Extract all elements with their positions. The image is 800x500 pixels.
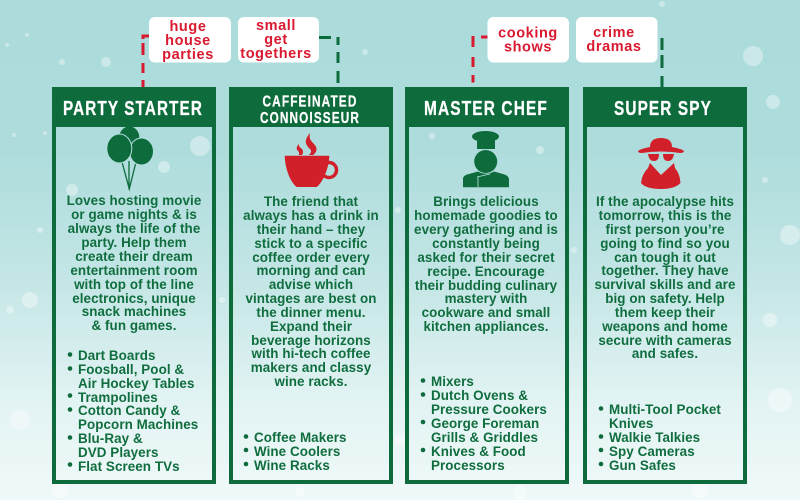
heading: CAFFEINATED	[262, 94, 358, 110]
description	[243, 194, 379, 389]
description: every gathering and is	[414, 222, 558, 237]
panel: caffeinated connoisseur	[229, 87, 393, 482]
gift list: Walkie Talkies	[609, 430, 700, 445]
gift list: Processors	[431, 458, 505, 473]
icon: spy	[638, 138, 684, 189]
gift list: Trampolines	[78, 390, 158, 405]
heading: MASTER CHEF	[424, 97, 548, 120]
panel: party starter	[52, 87, 216, 482]
tag: huge house parties: house	[165, 33, 211, 49]
tag: huge house parties	[149, 17, 231, 63]
heading: SUPER SPY	[614, 97, 712, 120]
tag: huge house parties: parties	[162, 47, 214, 63]
description: & fun games.	[91, 318, 177, 333]
icon: balloons	[107, 126, 154, 189]
heading: CONNOISSEUR	[260, 110, 360, 127]
tag: cooking shows	[488, 17, 569, 62]
tag: crime dramas	[576, 17, 658, 62]
gift list: Grills & Griddles	[431, 430, 538, 445]
gift list: Knives	[609, 416, 653, 431]
description	[594, 194, 736, 361]
description: wine racks.	[273, 374, 348, 389]
description: beverage horizons	[251, 333, 371, 348]
connector: small get togethers	[319, 37, 338, 83]
tag: crime dramas: dramas	[586, 39, 642, 55]
gift list	[599, 402, 721, 473]
description: going to find so you	[600, 236, 730, 251]
description: electronics, unique	[72, 291, 196, 306]
tag: small get togethers: get	[264, 32, 288, 48]
gift list: Knives & Food	[431, 444, 526, 459]
gift list: Gun Safes	[609, 458, 676, 473]
gift list: Pressure Cookers	[431, 402, 547, 417]
description: or game nights & is	[71, 207, 197, 222]
description	[67, 193, 201, 333]
description: recipe. Encourage	[427, 264, 545, 279]
description: morning and can	[256, 263, 366, 278]
description: kitchen appliances.	[423, 319, 549, 334]
description: their budding culinary	[415, 278, 558, 293]
gift list: Mixers	[431, 374, 474, 389]
description: If the apocalypse hits	[596, 194, 734, 209]
description: with top of the line	[73, 277, 194, 292]
description: their hand – they	[257, 222, 366, 237]
connector: huge house parties	[143, 36, 149, 87]
gift list: Flat Screen TVs	[78, 459, 180, 474]
gift list	[244, 430, 347, 473]
gift list: George Foreman	[431, 416, 539, 431]
description: can tough it out	[614, 250, 716, 265]
description: survival skills and are	[594, 277, 736, 292]
gift list: Wine Racks	[254, 458, 330, 473]
description: makers and classy	[251, 360, 372, 375]
connector: cooking shows	[473, 36, 488, 82]
gift list: Multi-Tool Pocket	[609, 402, 721, 417]
description: stick to a specific	[254, 236, 368, 251]
description: first person you’re	[605, 222, 725, 237]
description: advise which	[269, 277, 353, 292]
description: coffee order every	[252, 250, 370, 265]
gift list: DVD Players	[78, 445, 159, 460]
description: together. They have	[601, 263, 729, 278]
gift list: Dart Boards	[78, 348, 156, 363]
heading	[260, 94, 360, 127]
description: them keep their	[615, 305, 716, 320]
description: tomorrow, this is the	[599, 208, 731, 223]
description: secure with cameras	[598, 333, 732, 348]
gift list: Air Hockey Tables	[78, 376, 194, 391]
description: Expand their	[270, 319, 353, 334]
description: Brings delicious	[433, 194, 539, 209]
gift list: Dutch Ovens &	[431, 388, 528, 403]
tag: cooking shows: cooking	[498, 26, 558, 42]
description: cookware and small	[422, 305, 550, 320]
description: with hi-tech coffee	[250, 346, 371, 361]
icon: chef	[463, 131, 509, 187]
description: the dinner menu.	[256, 305, 366, 320]
description: always the life of the	[68, 221, 200, 236]
description: party. Help them	[81, 235, 187, 250]
gift list: Foosball, Pool &	[78, 362, 184, 377]
tag: small get togethers	[238, 17, 319, 62]
gift list: Blu-Ray &	[78, 431, 143, 446]
gift list: Cotton Candy &	[78, 403, 181, 418]
description	[414, 194, 558, 334]
tag: cooking shows: shows	[504, 40, 552, 56]
description: and safes.	[632, 346, 698, 361]
icon: coffee cup	[285, 133, 336, 187]
gift list: Coffee Makers	[254, 430, 347, 445]
description: vintages are best on	[245, 291, 377, 306]
tag: small get togethers: togethers	[240, 46, 312, 62]
description: The friend that	[264, 194, 359, 209]
description: entertainment room	[70, 263, 198, 278]
heading: PARTY STARTER	[63, 97, 203, 120]
tag: huge house parties: huge	[169, 19, 207, 35]
description: always has a drink in	[243, 208, 379, 223]
description: snack machines	[82, 304, 186, 319]
panel: super spy	[583, 87, 747, 482]
description: asked for their secret	[417, 250, 555, 265]
description: constantly being	[432, 236, 540, 251]
gift list: Popcorn Machines	[78, 417, 198, 432]
description: create their dream	[75, 249, 193, 264]
description: mastery with	[445, 291, 527, 306]
gift list: Wine Coolers	[254, 444, 340, 459]
connector: crime dramas	[660, 38, 664, 87]
gift list	[68, 348, 198, 474]
description: homemade goodies to	[414, 208, 558, 223]
gift list	[421, 374, 547, 473]
description: Loves hosting movie	[67, 193, 201, 208]
tag: crime dramas: crime	[593, 25, 635, 41]
tag: small get togethers: small	[256, 18, 296, 34]
panel: master chef	[405, 87, 569, 482]
gift list: Spy Cameras	[609, 444, 695, 459]
description: weapons and home	[601, 319, 728, 334]
description: big on safety. Help	[605, 291, 725, 306]
